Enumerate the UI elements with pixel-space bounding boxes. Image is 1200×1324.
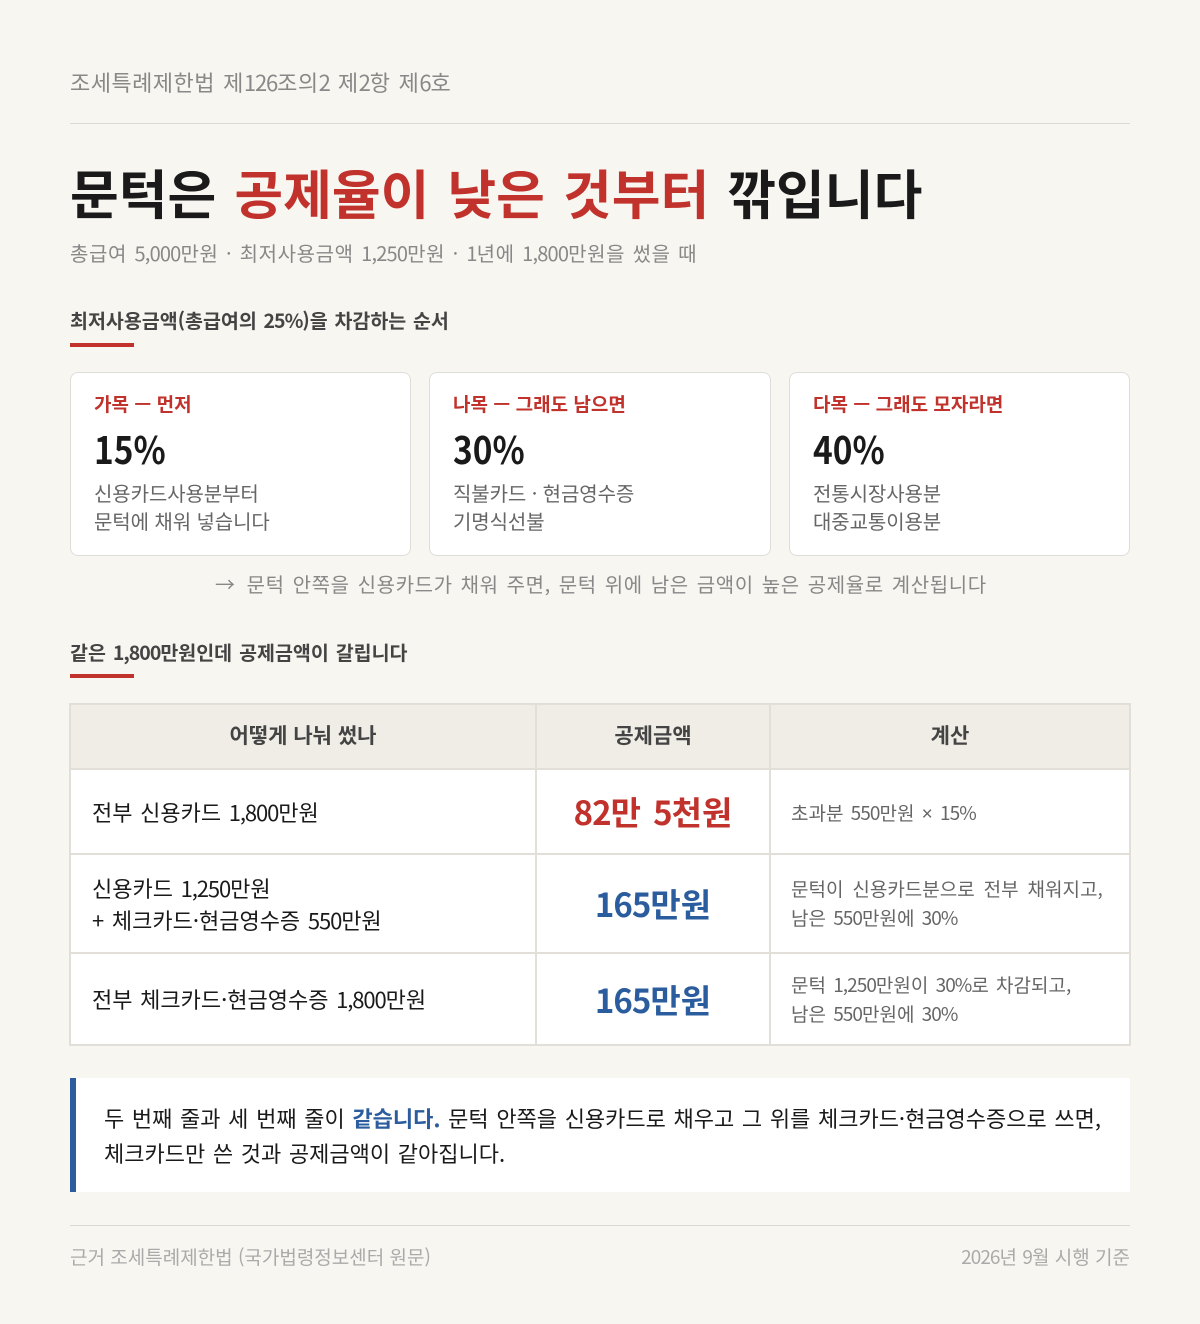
comparison table: 계산 — [931, 720, 969, 750]
comparison table: 문턱이 신용카드분으로 전부 채워지고, — [791, 875, 1103, 902]
card: 가목: 15% — [94, 420, 166, 475]
row 2: + 체크카드·현금영수증 550만원 — [92, 904, 382, 936]
comparison table: 남은 550만원에 30% — [791, 904, 957, 931]
footer source: 근거 조세특례제한법 (국가법령정보센터 원문) — [70, 1243, 431, 1270]
comparison table — [69, 703, 1131, 1046]
arrow note: → 문턱 안쪽을 신용카드가 채워 주면, 문턱 위에 남은 금액이 높은 공제율로 계산됩니다 — [215, 569, 987, 598]
card: 나목: 나목 — 그래도 남으면 — [453, 390, 626, 417]
row 2 — [92, 872, 382, 936]
footer date: 2026년 9월 시행 기준 — [961, 1243, 1130, 1270]
comparison table: 공제금액 — [614, 720, 692, 750]
card: 가목 — [70, 372, 411, 556]
comparison table: 남은 550만원에 30% — [791, 1000, 957, 1027]
row 3: 전부 체크카드·현금영수증 1,800만원 — [92, 983, 426, 1015]
card: 다목: 전통시장사용분 — [813, 478, 941, 507]
row 2: 신용카드 1,250만원 — [92, 872, 271, 904]
comparison table: 문턱 1,250만원이 30%로 차감되고, — [791, 971, 1071, 998]
callout: 체크카드만 쓴 것과 공제금액이 같아집니다. — [104, 1137, 505, 1169]
comparison table: 초과분 550만원 × 15% — [791, 799, 976, 826]
card: 나목 — [429, 372, 771, 556]
comparison table: 165만원 — [595, 879, 711, 927]
card: 다목: 다목 — 그래도 모자라면 — [813, 390, 1003, 417]
card: 다목: 40% — [813, 420, 885, 475]
card: 가목: 가목 — 먼저 — [94, 390, 192, 417]
card: 나목: 기명식선불 — [453, 506, 544, 535]
card: 다목 — [789, 372, 1130, 556]
card: 가목: 신용카드사용분부터 — [94, 478, 259, 507]
card: 나목: 직불카드 · 현금영수증 — [453, 478, 634, 507]
comparison table: 82만 5천원 — [574, 787, 732, 835]
callout: 두 번째 줄과 세 번째 줄이 같습니다. 문턱 안쪽을 신용카드로 채우고 그 위를 체크카드·현금영수증으로 쓰면, — [104, 1102, 1101, 1134]
law reference: 조세특례제한법 제126조의2 제2항 제6호 — [70, 66, 451, 98]
callout — [70, 1078, 1130, 1192]
section heading: comparison: 같은 1,800만원인데 공제금액이 갈립니다 — [70, 637, 408, 666]
card: 가목: 문턱에 채워 넣습니다 — [94, 506, 270, 535]
row 1: 전부 신용카드 1,800만원 — [92, 796, 319, 828]
card: 다목: 대중교통이용분 — [813, 506, 941, 535]
subtitle: 총급여 5,000만원 · 최저사용금액 1,250만원 · 1년에 1,800만원을 썼을 때 — [70, 238, 697, 267]
title: 문턱은 공제율이 낮은 것부터 깎입니다 — [70, 154, 922, 230]
section heading: order: 최저사용금액(총급여의 25%)을 차감하는 순서 — [70, 305, 449, 334]
table header — [71, 705, 1129, 769]
comparison table: 165만원 — [595, 975, 711, 1023]
card: 나목: 30% — [453, 420, 525, 475]
comparison table: 어떻게 나눠 썼나 — [230, 720, 376, 750]
